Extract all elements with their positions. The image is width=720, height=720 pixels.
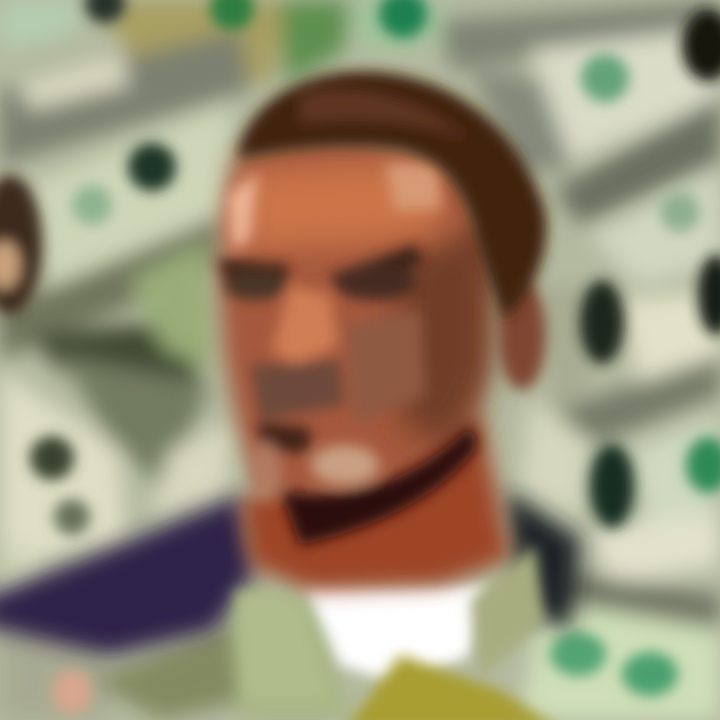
nose <box>272 285 338 365</box>
face details <box>240 160 490 450</box>
upper lip stubble <box>250 360 345 420</box>
lapel money <box>235 545 560 720</box>
forehead light <box>228 172 258 250</box>
eyebrows <box>218 258 290 285</box>
head <box>220 140 486 510</box>
mouth <box>258 422 310 452</box>
eyes <box>223 270 287 300</box>
jacket <box>0 490 580 655</box>
cheek shade <box>345 310 425 425</box>
neck <box>240 410 510 590</box>
ear <box>498 280 546 390</box>
chin light <box>311 445 379 485</box>
hair <box>238 71 547 320</box>
shirt <box>305 585 490 685</box>
jaw shadow <box>280 425 478 545</box>
